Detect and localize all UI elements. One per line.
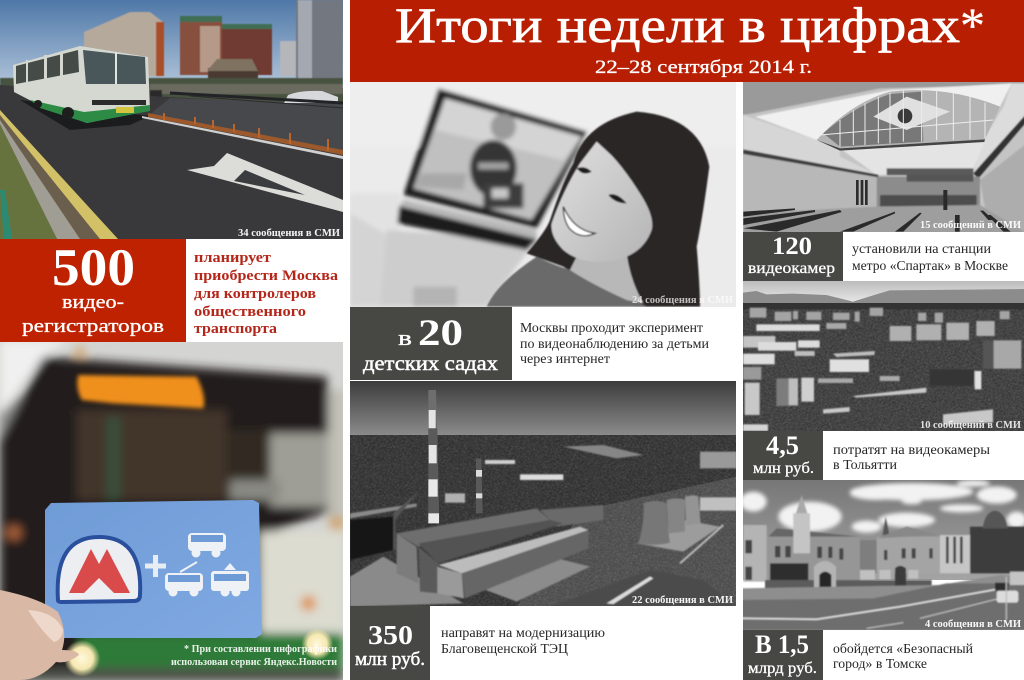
stat panel: 350 million rubles: млн руб. xyxy=(355,649,425,670)
photo: Togliatti city panorama xyxy=(743,281,1024,431)
stat panel: 20 kindergartens: в xyxy=(398,325,412,350)
lane marking xyxy=(187,153,343,212)
stat panel: 500 video recorders xyxy=(0,239,186,342)
stat panel: 350 million rubles xyxy=(350,606,430,680)
stat panel: 500 video recorders: видео- xyxy=(62,292,124,313)
text: Togliatti cameras: потратят на видеокамеры xyxy=(833,442,990,457)
text: Spartak station cameras: установили на станции xyxy=(852,241,991,256)
date: 22–28 сентября 2014 г. xyxy=(595,57,812,78)
icon: plus xyxy=(145,555,166,577)
text: Spartak station cameras xyxy=(852,241,1008,273)
stat panel: 20 kindergartens: детских садах xyxy=(363,353,498,375)
text: plan description: транспорта xyxy=(194,321,278,337)
text: power plant modernization: Благовещенской ТЭЦ xyxy=(441,641,568,656)
photo: articulated bus on a Moscow road xyxy=(0,0,343,239)
text: plan description: общественного xyxy=(194,304,306,320)
text: Safe City in Tomsk: обойдется «Безопасный xyxy=(833,641,973,656)
text: power plant modernization xyxy=(441,625,605,656)
stat panel: 4.5 million rubles xyxy=(743,431,823,480)
hand xyxy=(0,590,79,680)
icon: trolleybus xyxy=(165,562,203,596)
stat panel: 20 kindergartens: 20 xyxy=(418,313,463,354)
bus xyxy=(13,46,150,123)
media count: 24 messages: 24 сообщения в СМИ xyxy=(632,295,733,306)
text: kindergarten experiment: по видеонаблюдению за детьми xyxy=(520,336,709,351)
photo: Blagoveshchensk power plant aerial xyxy=(350,381,737,608)
text: power plant modernization: направят на модернизацию xyxy=(441,625,605,640)
text: plan description: планирует xyxy=(194,250,272,266)
stat panel: 1.5 billion rubles: В 1,5 xyxy=(755,630,809,659)
title banner xyxy=(350,0,1024,82)
stat panel: 500 video recorders: 500 xyxy=(52,239,135,297)
text: Togliatti cameras xyxy=(833,442,990,472)
photo: transit card held in front of a bus xyxy=(0,340,345,680)
photo: woman with laptop watching a child xyxy=(350,80,737,310)
text: Safe City in Tomsk xyxy=(833,641,973,671)
curb and grass xyxy=(0,115,100,239)
text: kindergarten experiment: через интернет xyxy=(520,351,610,366)
photo: Tomsk street and historic buildings xyxy=(740,480,1024,633)
text: plan description xyxy=(194,250,339,337)
stat panel: 1.5 billion rubles xyxy=(743,630,823,680)
text: Spartak station cameras: метро «Спартак» в Москве xyxy=(852,258,1008,273)
footnote: * При составлении инфографики xyxy=(184,644,337,655)
text: plan description: для контролеров xyxy=(194,286,316,302)
media count: 10 messages: 10 сообщений в СМИ xyxy=(920,420,1021,431)
photo: Spartak metro station hall xyxy=(740,80,1024,233)
text: plan description: приобрести Москва xyxy=(194,268,339,284)
media count: 34 messages: 34 сообщения в СМИ xyxy=(238,228,340,239)
stat panel: 500 video recorders: регистраторов xyxy=(22,316,164,337)
text: kindergarten experiment xyxy=(520,320,709,366)
road surface xyxy=(0,85,343,239)
stat panel: 20 kindergartens xyxy=(350,307,512,380)
footnote xyxy=(171,644,337,668)
stat panel: 120 cameras: 120 xyxy=(772,233,812,260)
text: Togliatti cameras: в Тольятти xyxy=(833,457,897,472)
icon: bus xyxy=(188,533,226,558)
icon: metro logo xyxy=(58,537,140,602)
text: Safe City in Tomsk: город» в Томске xyxy=(833,656,927,671)
footnote: использован сервис Яндекс.Новости xyxy=(171,657,337,668)
icon: tram xyxy=(211,563,249,596)
stat panel: 120 cameras xyxy=(743,232,843,281)
media count: 22 messages: 22 сообщения в СМИ xyxy=(632,595,733,606)
stat panel: 4.5 million rubles: млн руб. xyxy=(753,460,814,477)
stat panel: 120 cameras: видеокамер xyxy=(748,260,835,277)
text: kindergarten experiment: Москвы проходит эксперимент xyxy=(520,320,703,335)
stat panel: 1.5 billion rubles: млрд руб. xyxy=(748,660,817,677)
transit card xyxy=(45,500,262,638)
media count: 4 messages: 4 сообщения в СМИ xyxy=(925,619,1021,630)
stat panel: 4.5 million rubles: 4,5 xyxy=(766,431,799,460)
media count: 15 messages: 15 сообщений в СМИ xyxy=(920,220,1021,231)
stat panel: 350 million rubles: 350 xyxy=(368,620,413,650)
